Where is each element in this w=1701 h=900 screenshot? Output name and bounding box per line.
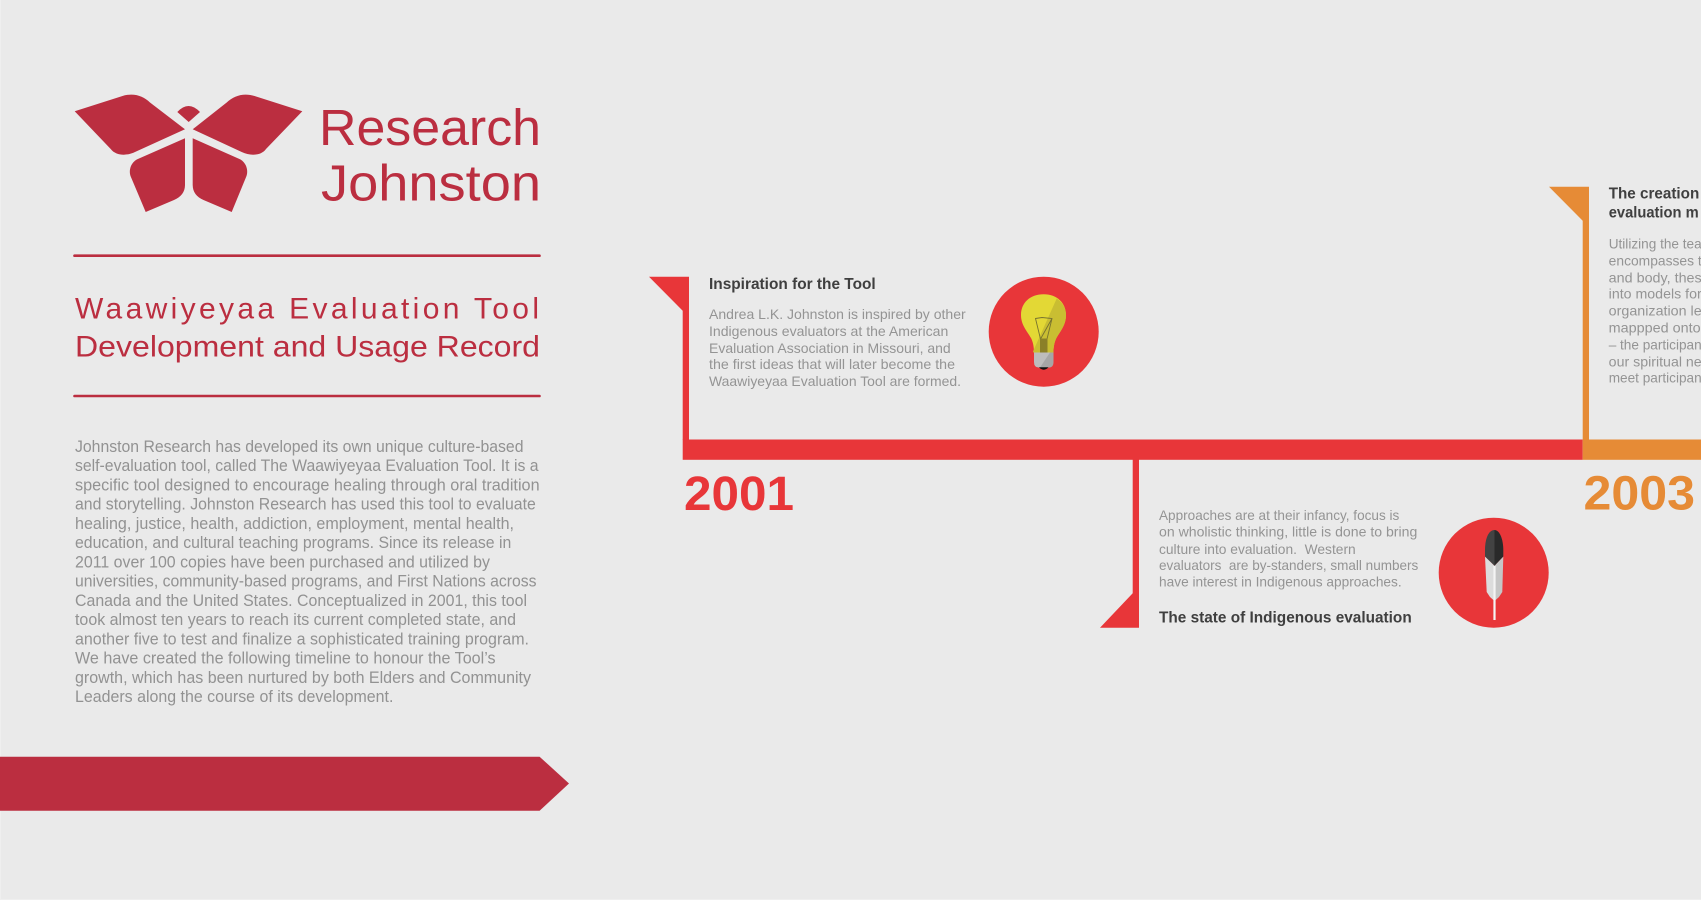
intro text block: education, and cultural teaching programs. Since its release in [75,534,511,552]
intro text block: and storytelling. Johnston Research has used this tool to evaluate [75,496,536,514]
intro text block: growth, which has been nurtured by both Elders and Community [75,669,532,687]
event description: into models for [1609,286,1701,301]
intro text block: 2011 over 100 copies have been purchased and utilized by [75,553,491,571]
event heading [1609,185,1699,222]
logo wordmark: Research [319,99,541,156]
arrow banner [0,757,569,811]
logo: Research Johnston [75,95,541,212]
flag: 2001 upper [649,277,689,440]
icon: butterfly [75,95,302,212]
logo wordmark [319,99,541,212]
year: 2003: 2003 [1584,468,1695,520]
event description [709,307,966,389]
event description: and body, thes [1609,270,1701,285]
flag: 2003 upper [1549,187,1589,440]
event description: our spiritual ne [1609,355,1701,370]
intro text block: universities, community-based programs, and First Nations across [75,573,536,591]
year: 2001: 2001 [684,468,794,521]
intro text block: Leaders along the course of its development. [75,688,393,706]
event description: organization le [1609,304,1701,319]
title [75,292,540,364]
intro text block: specific tool designed to encourage healing through oral tradition [75,476,540,494]
event heading: The state of Indigenous evaluation [1159,610,1412,627]
event description: Utilizing the tea [1609,236,1701,251]
intro text block: another five to test and finalize a sophisticated training program. [75,630,529,648]
event description: Approaches are at their infancy, focus is [1159,508,1399,523]
event: Inspiration for the Tool [709,276,966,389]
event description: have interest in Indigenous approaches. [1159,575,1402,590]
event description: Evaluation Association in Missouri, and [709,341,951,356]
timeline bar: 2001 segment [683,440,1583,460]
intro text block: took almost ten years to reach its current completed state, and [75,611,516,629]
intro text block: self-evaluation tool, called The Waawiyeyaa Evaluation Tool. It is a [75,457,539,475]
flag: 2001 lower [1100,459,1139,628]
event description: the first ideas that will later become the [709,357,955,372]
event description: encompasses t [1609,254,1701,269]
event: The state of Indigenous evaluation [1159,508,1418,627]
title: Waawiyeyaa Evaluation Tool [75,292,539,325]
event description: Waawiyeyaa Evaluation Tool are formed. [709,374,961,389]
intro text block: Canada and the United States. Conceptualized in 2001, this tool [75,592,527,610]
event description: Andrea L.K. Johnston is inspired by other [709,307,966,322]
intro text block [75,438,540,706]
event description [1159,508,1418,590]
event heading: The creation [1609,185,1699,202]
event heading: Inspiration for the Tool [709,276,876,293]
logo wordmark: Johnston [321,155,541,212]
intro text block: We have created the following timeline to honour the Tool’s [75,650,496,668]
event description [1609,236,1701,385]
icon: feather [1439,518,1549,628]
event description: mappped onto [1609,320,1701,335]
event description: meet participan [1609,370,1701,385]
event: The creation (clipped at right edge) [1609,185,1701,385]
intro text block: healing, justice, health, addiction, employment, mental health, [75,515,514,533]
icon: light bulb [989,277,1099,387]
event description: Indigenous evaluators at the American [709,324,948,339]
event description: – the participan [1609,337,1701,352]
timeline bar: 2003 segment [1583,440,1701,460]
intro text block: Johnston Research has developed its own unique culture-based [75,438,524,456]
event description: on wholistic thinking, little is done to bring [1159,525,1417,540]
event description: evaluators are by-standers, small numbers [1159,558,1418,573]
title: Development and Usage Record [75,331,540,364]
event description: culture into evaluation. Western [1159,542,1356,557]
